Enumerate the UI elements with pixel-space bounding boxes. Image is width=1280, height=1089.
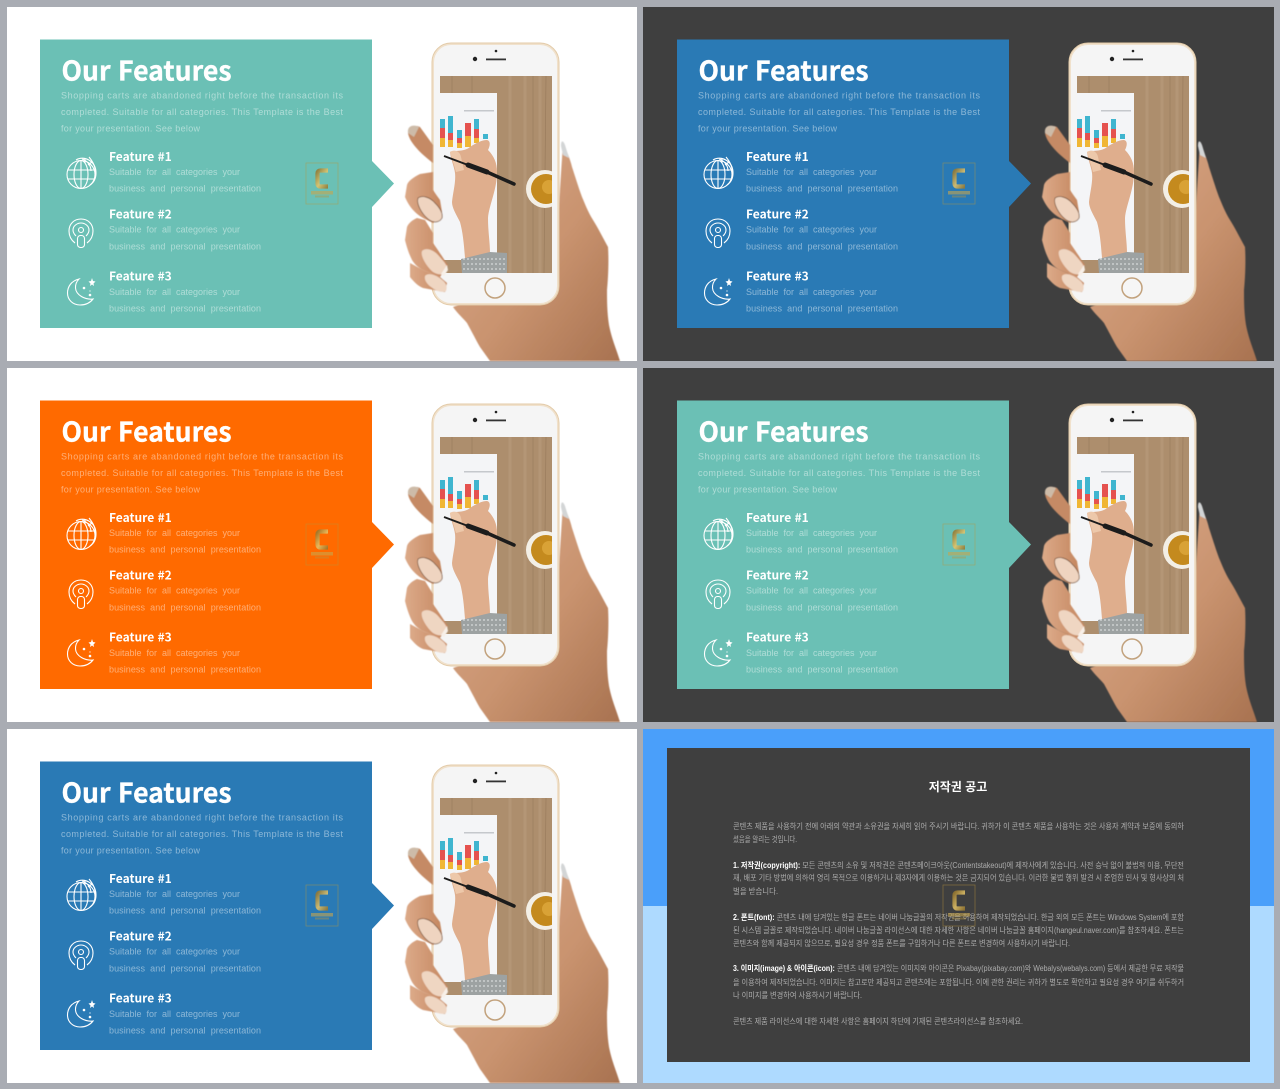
intro text: for your presentation. See below <box>698 484 838 494</box>
clause 1: copyright <box>733 860 1184 896</box>
feature 2: Suitable for all categories your <box>746 224 877 234</box>
intro text: for your presentation. See below <box>698 124 838 134</box>
feature 2: business and personal presentation <box>109 964 261 974</box>
intro paragraph <box>733 821 1185 844</box>
feature 2: Feature #2 <box>746 566 809 584</box>
icon: podcast <box>69 219 93 248</box>
feature 2 <box>109 566 261 612</box>
feature 1: Suitable for all categories your <box>109 167 240 177</box>
feature 3 <box>109 990 261 1036</box>
feature 1: Feature #1 <box>746 509 809 526</box>
heading: Our Features <box>698 50 868 88</box>
icon: podcast <box>69 580 93 608</box>
clause 1: copyright: 재, 배포 기타 방법에 의하여 영리 목적으로 이용하거나 제3자에게 이용하는 것은 금지되어 있습니다. 이러한 불법 행위 발견 시 준엄한 민사 및 형사상의 처 <box>733 872 1184 882</box>
feature 3: business and personal presentation <box>746 304 898 314</box>
icon: moon and stars <box>704 639 732 666</box>
feature 3: Feature #3 <box>109 268 172 284</box>
clause 3: image and icon: 나 이미지를 변경하여 사용하시기 바랍니다. <box>733 990 862 1000</box>
clause 2: font: 된 시스템 글꼴로 제작되었습니다. 네이버 나눔글꼴 라이선스에 대한 자세한 사항은 네이버 나눔글꼴 홈페이지(hangeul.naver.com)를 참조하세요. 폰트는 <box>733 925 1184 935</box>
feature 3: Suitable for all categories your <box>109 1009 240 1019</box>
icon: podcast <box>706 580 730 608</box>
intro text: for your presentation. See below <box>61 846 200 856</box>
slide 1: teal on white <box>7 7 637 361</box>
clause 3: image and icon <box>733 963 1184 1000</box>
icon: globe <box>67 879 96 910</box>
icon: moon and stars <box>704 278 732 305</box>
icon: globe <box>67 518 96 550</box>
feature 1: Feature #1 <box>746 148 809 165</box>
icon: globe <box>704 518 733 550</box>
intro text: for your presentation. See below <box>61 124 200 134</box>
feature 2: business and personal presentation <box>746 602 898 612</box>
intro text <box>698 452 980 494</box>
logo watermark <box>306 885 338 926</box>
feature 3: Feature #3 <box>746 628 809 646</box>
feature 3: Feature #3 <box>109 990 172 1006</box>
logo watermark <box>943 885 975 926</box>
clause 1: copyright: 벌을 받습니다. <box>733 886 778 896</box>
slide 5: blue on white <box>7 729 637 1083</box>
heading: Our Features <box>62 410 232 450</box>
license note: 콘텐츠 제품 라이선스에 대한 자세한 사항은 홈페이지 하단에 기재된 콘텐츠라이선스를 참조하세요. <box>733 1016 1023 1026</box>
feature 2: business and personal presentation <box>109 242 261 252</box>
feature 2 <box>109 928 261 974</box>
slide 6: copyright notice <box>643 729 1274 1083</box>
logo watermark <box>943 163 975 204</box>
feature 3: business and personal presentation <box>746 664 898 674</box>
feature 1 <box>109 509 261 554</box>
slide 2: blue on dark <box>643 7 1274 361</box>
feature 1: business and personal presentation <box>109 184 261 194</box>
logo watermark <box>306 163 338 204</box>
feature 3 <box>746 268 898 314</box>
feature 1: Suitable for all categories your <box>109 528 240 538</box>
feature 3: Suitable for all categories your <box>746 287 877 297</box>
feature 1: business and personal presentation <box>746 184 898 194</box>
phone in hand <box>1042 43 1257 361</box>
icon: globe <box>704 157 733 188</box>
feature 3: Feature #3 <box>109 628 172 646</box>
feature 1: Feature #1 <box>109 870 172 887</box>
logo watermark <box>943 524 975 565</box>
feature 1: Feature #1 <box>109 509 172 526</box>
feature card <box>677 400 1031 689</box>
logo watermark <box>306 524 338 565</box>
feature 2: Suitable for all categories your <box>746 586 877 596</box>
icon: podcast <box>69 941 93 970</box>
feature 1 <box>109 148 261 194</box>
intro paragraph: 셨음을 알리는 것입니다. <box>733 834 797 844</box>
phone in hand <box>405 765 620 1083</box>
feature 1: business and personal presentation <box>109 544 261 554</box>
icon: podcast <box>706 219 730 248</box>
intro text <box>61 452 344 494</box>
feature 1: Suitable for all categories your <box>746 167 877 177</box>
feature 2: Suitable for all categories your <box>109 224 240 234</box>
phone in hand <box>405 43 620 361</box>
feature 3: business and personal presentation <box>109 1026 261 1036</box>
heading: Our Features <box>62 772 232 810</box>
intro text: for your presentation. See below <box>61 484 200 494</box>
feature 2: business and personal presentation <box>746 242 898 252</box>
feature 1: Feature #1 <box>109 148 172 165</box>
feature 2 <box>109 206 261 252</box>
feature 2: Suitable for all categories your <box>109 586 240 596</box>
intro paragraph: 콘텐츠 제품을 사용하기 전에 아래의 약관과 소유권을 자세히 읽어 주시기 바랍니다. 귀하가 이 콘텐츠 제품을 사용하는 것은 사용자 계약과 보증에 동의하 <box>733 821 1185 831</box>
feature card <box>40 400 394 689</box>
feature 3: Feature #3 <box>746 268 809 284</box>
icon: moon and stars <box>68 1000 96 1027</box>
feature 1: business and personal presentation <box>109 906 261 916</box>
intro text: Shopping carts are abandoned right before the transaction its <box>698 452 980 462</box>
feature 3 <box>109 628 261 674</box>
heading: Our Features <box>698 410 868 450</box>
icon: moon and stars <box>68 278 96 305</box>
feature 1: Suitable for all categories your <box>746 528 877 538</box>
feature 2: Suitable for all categories your <box>109 946 240 956</box>
feature 1 <box>746 148 898 194</box>
intro text: completed. Suitable for all categories. This Template is the Best <box>61 107 343 117</box>
notice panel <box>667 748 1250 1062</box>
feature 3: Suitable for all categories your <box>109 287 240 297</box>
feature card <box>40 762 394 1050</box>
intro text: completed. Suitable for all categories. This Template is the Best <box>698 107 980 117</box>
feature 2: Feature #2 <box>746 206 809 222</box>
feature 3: Suitable for all categories your <box>746 648 877 658</box>
feature 1 <box>109 870 261 916</box>
icon: globe <box>67 157 96 188</box>
feature 2: business and personal presentation <box>109 602 261 612</box>
feature 2 <box>746 206 898 252</box>
slide 3: orange on white <box>7 368 637 722</box>
intro text: Shopping carts are abandoned right before the transaction its <box>61 90 344 100</box>
clause 3: image and icon: 을 이용하여 제작되었습니다. 이미지는 참고로만 제공되고 콘텐츠에는 포함됩니다. 이에 관한 권리는 귀하가 별도로 확인하고 필요성 경우 여기를 쉬두하거 <box>733 977 1184 987</box>
clause 2: font: 2. 폰트(font): 콘텐츠 내에 담겨있는 한글 폰트는 네이버 나눔글꼴의 저작권을 허용하여 제작되었습니다. 한글 외의 모든 폰트는 Windows System에 포함 <box>733 912 1185 922</box>
phone in hand <box>405 404 620 722</box>
icon: moon and stars <box>68 639 96 666</box>
slide 4: teal on dark <box>643 368 1274 722</box>
feature 3: business and personal presentation <box>109 304 261 314</box>
feature 1: Suitable for all categories your <box>109 889 240 899</box>
intro text: completed. Suitable for all categories. This Template is the Best <box>61 468 343 478</box>
feature 2: Feature #2 <box>109 928 172 944</box>
feature 3: business and personal presentation <box>109 664 261 674</box>
clause 2: font <box>733 912 1185 948</box>
intro text: completed. Suitable for all categories. This Template is the Best <box>698 468 980 478</box>
feature 3 <box>109 268 261 314</box>
feature 2: Feature #2 <box>109 206 172 222</box>
clause 1: copyright: 1. 저작권(copyright): 모든 콘텐츠의 소유 및 저작권은 콘텐츠메이크아웃(Contentstakeout)에 제작사에게 있습니다. 사전 승낙 없이 불법적 이용, 무단전 <box>733 860 1184 870</box>
feature 1: business and personal presentation <box>746 544 898 554</box>
clause 3: image and icon: 3. 이미지(image) & 아이콘(icon): 콘텐츠 내에 담겨있는 이미지와 아이콘은 Pixabay(pixabay.com)와 Webalys(webalys.com) 등에서 제공한 무료 저작물 <box>733 963 1184 973</box>
phone in hand <box>1042 404 1257 722</box>
heading: Our Features <box>62 50 232 88</box>
feature card <box>677 40 1031 328</box>
feature 3 <box>746 628 898 674</box>
feature card <box>40 40 394 328</box>
clause 2: font: 콘텐츠와 함께 제공되지 않으므로, 필요성 경우 정품 폰트를 구입하거나 다른 폰트로 변경하여 사용하시기 바랍니다. <box>733 938 1070 948</box>
notice title: 저작권 공고 <box>929 779 987 794</box>
intro text: completed. Suitable for all categories. This Template is the Best <box>61 829 343 839</box>
feature 2: Feature #2 <box>109 566 172 584</box>
intro text <box>61 90 344 134</box>
intro text: Shopping carts are abandoned right before the transaction its <box>61 452 344 462</box>
feature 2 <box>746 566 898 612</box>
feature 1 <box>746 509 898 554</box>
intro text: Shopping carts are abandoned right before the transaction its <box>698 90 980 100</box>
intro text <box>61 812 344 856</box>
intro text <box>698 90 980 134</box>
intro text: Shopping carts are abandoned right before the transaction its <box>61 812 344 822</box>
feature 3: Suitable for all categories your <box>109 648 240 658</box>
